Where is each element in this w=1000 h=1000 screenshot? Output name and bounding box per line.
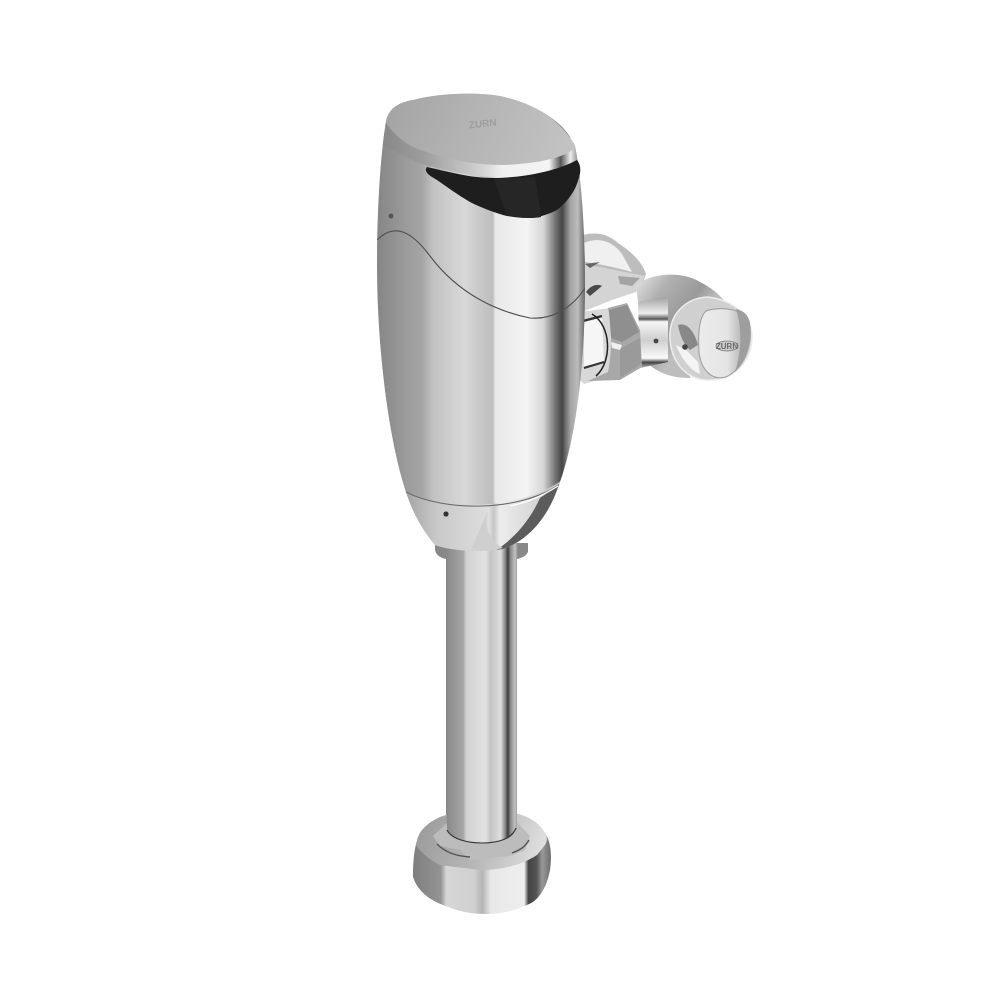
flush valve housing xyxy=(370,90,590,560)
hex nut xyxy=(588,303,642,381)
cap logo: ZURN xyxy=(468,118,497,131)
collar under body xyxy=(435,543,528,559)
connector sleeve xyxy=(638,296,668,368)
flange top face xyxy=(416,810,547,870)
hex seat xyxy=(433,820,530,860)
push button collar xyxy=(670,297,752,380)
flange outer wall xyxy=(413,810,551,914)
valve assembly xyxy=(580,234,752,384)
dark reflection on bowl xyxy=(495,484,562,551)
housing body xyxy=(370,90,590,560)
lower neck xyxy=(580,308,612,384)
top cap xyxy=(386,94,575,165)
tube lower end xyxy=(446,800,517,843)
seam line lower xyxy=(406,484,560,506)
supply tube xyxy=(446,555,517,830)
rim shading xyxy=(380,118,590,178)
screw lower xyxy=(443,511,449,517)
sensor window xyxy=(426,160,580,218)
upper stop fitting xyxy=(580,234,646,312)
floor flange base xyxy=(413,800,551,914)
curved panel seam xyxy=(377,231,585,318)
push button xyxy=(699,309,750,378)
elbow body xyxy=(636,275,726,378)
screw upper xyxy=(389,214,393,218)
lower bowl xyxy=(406,482,560,550)
product illustration: sensor flush valve xyxy=(377,94,753,914)
button logo: ZURN xyxy=(716,342,738,351)
